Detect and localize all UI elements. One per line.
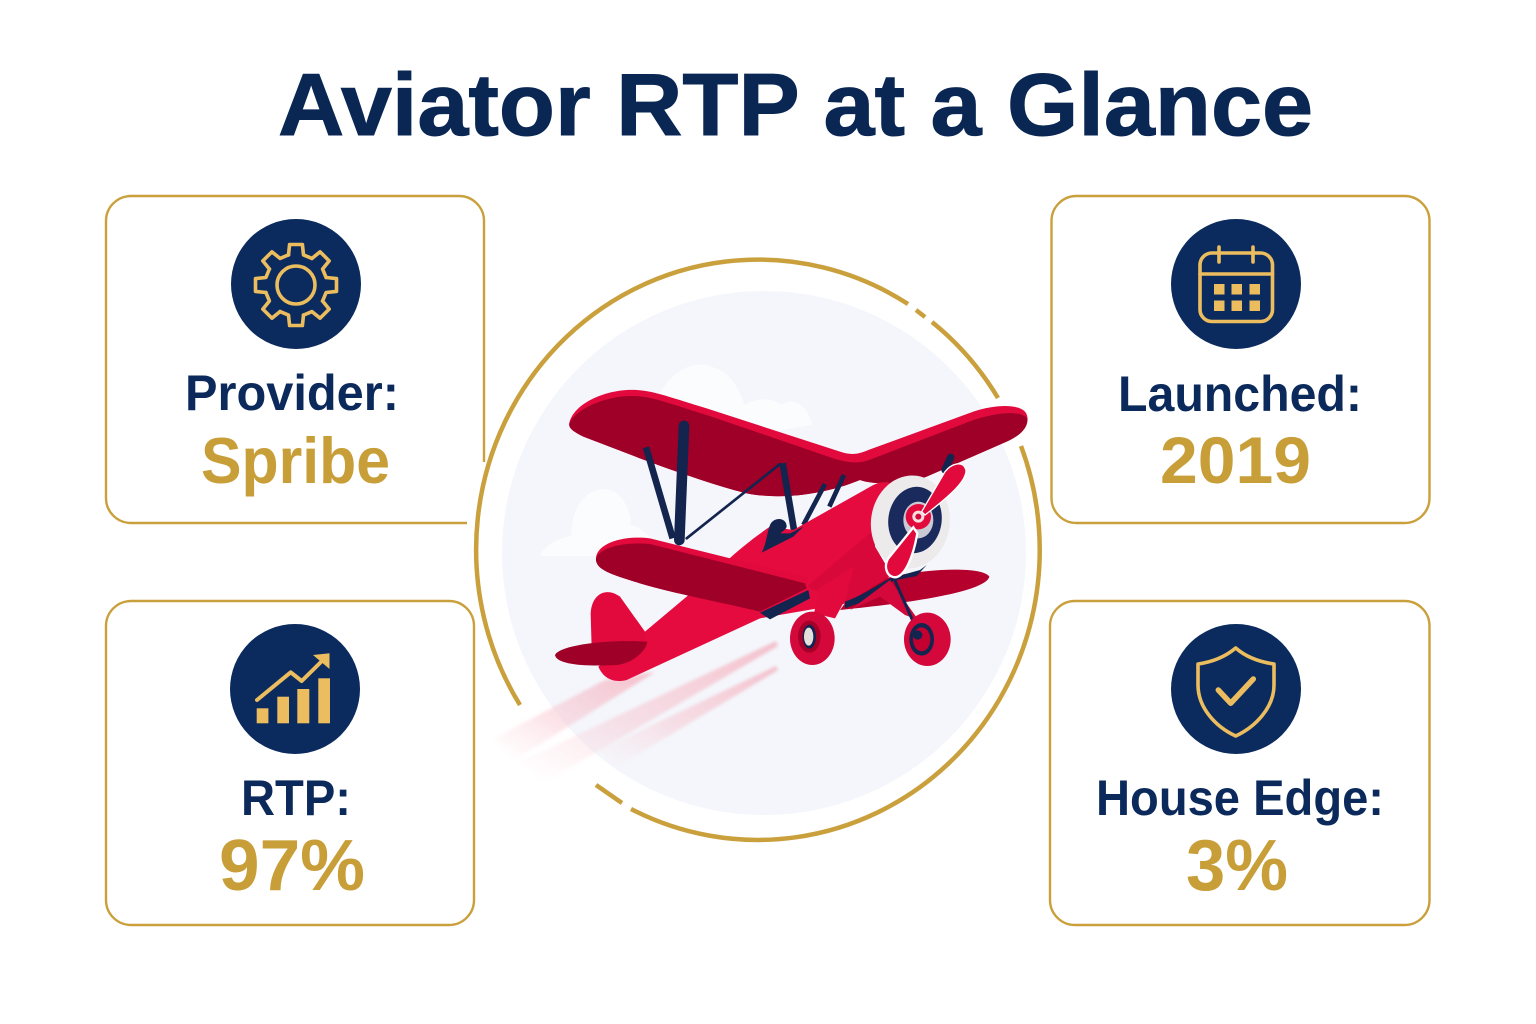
- panel: provider: [106, 196, 484, 523]
- value: 2019: 2019: [1160, 423, 1311, 497]
- gold ring with gaps: [476, 260, 1040, 840]
- tail: [555, 592, 647, 666]
- fuselage: [598, 482, 892, 681]
- title: Aviator RTP at a Glance: [278, 55, 1313, 154]
- value: Spribe: Spribe: [201, 424, 390, 497]
- label: house edge: House Edge:: [1096, 770, 1384, 826]
- icon: calendar: [1171, 219, 1301, 349]
- icon: rising bar chart: [230, 624, 360, 754]
- right wheel: [904, 613, 951, 666]
- propeller: [886, 464, 966, 577]
- label: RTP: RTP:: [241, 770, 351, 826]
- value: 97%: 97%: [219, 826, 365, 906]
- wing struts: [646, 426, 951, 540]
- panel: launched: [1052, 196, 1430, 523]
- clouds: [540, 364, 812, 556]
- label: launched: Launched:: [1118, 366, 1362, 422]
- icon: gear: [231, 219, 361, 349]
- panel: rtp: [106, 601, 474, 925]
- icon: shield with check: [1171, 624, 1301, 754]
- lower wing: [596, 538, 809, 612]
- illustration backdrop: sky circle: [502, 291, 1026, 815]
- navy belly: [760, 565, 927, 619]
- right lower wing: [840, 570, 989, 610]
- landing gear: [790, 566, 951, 666]
- engine cowl: [865, 470, 956, 574]
- value: 3%: 3%: [1186, 826, 1288, 906]
- illustration: red biplane: [555, 390, 1028, 681]
- speed trails: [495, 641, 778, 782]
- left wheel: [790, 612, 835, 665]
- label: provider: Provider:: [185, 365, 399, 421]
- panel: house edge: [1050, 601, 1430, 925]
- top wing: [569, 390, 1028, 496]
